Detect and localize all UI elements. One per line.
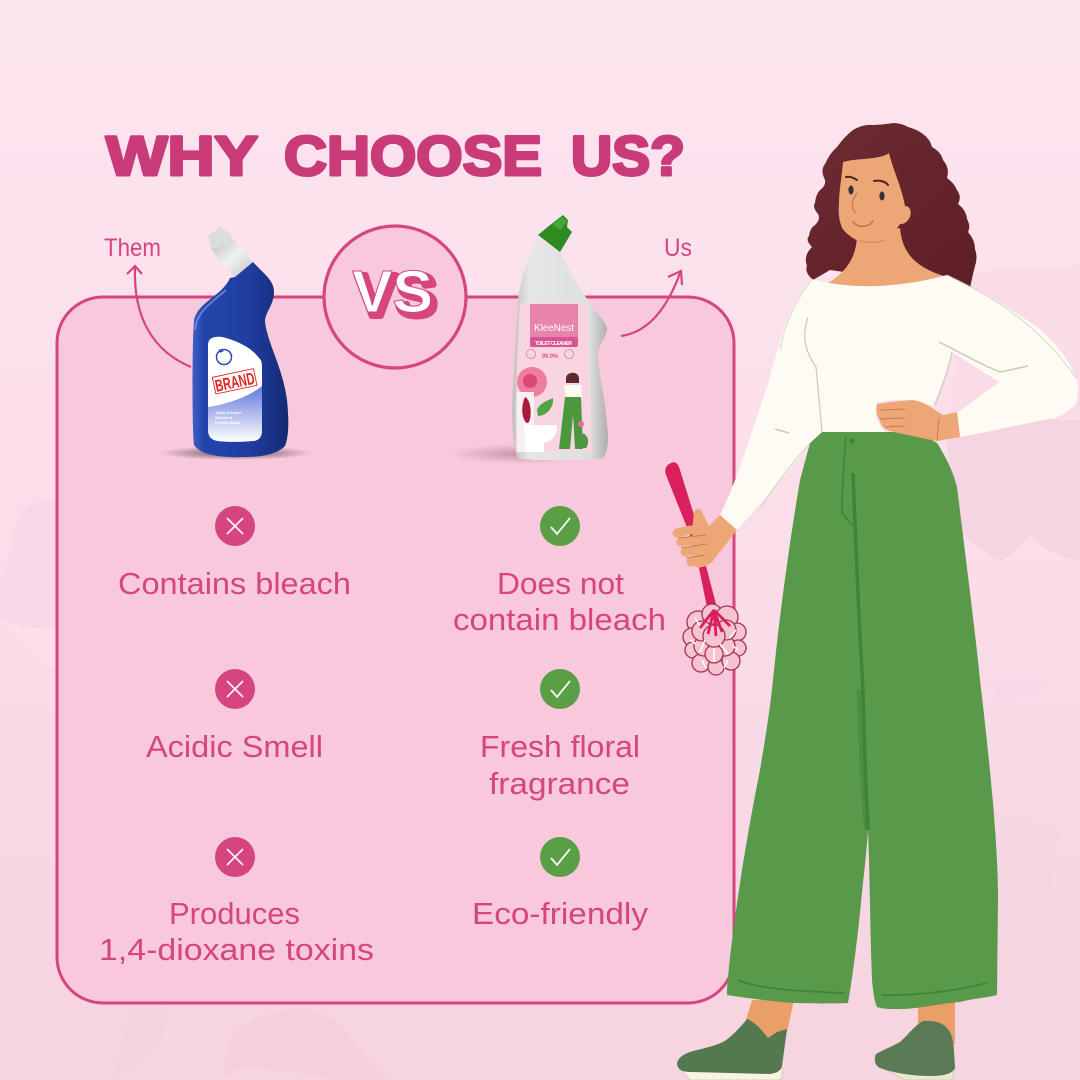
vs badge (324, 226, 466, 368)
trouser shading (738, 436, 987, 995)
item: acidic smell: Acidic Smell (146, 729, 323, 764)
item: toxins: Produces (169, 896, 300, 931)
label: Us: Us (664, 234, 692, 262)
item: no bleach (453, 506, 666, 637)
sweater folds (761, 275, 1076, 507)
title: US? (571, 124, 685, 187)
column: them (99, 506, 374, 967)
hand holding brush (677, 509, 737, 567)
item: eco-friendly (472, 837, 649, 931)
title: WHY (106, 124, 258, 187)
vs badge: VS (352, 259, 433, 325)
item: contains bleach (118, 506, 351, 601)
illustration: woman with toilet brush (665, 123, 1078, 1080)
bottle label: BRAND (213, 369, 256, 396)
panel: comparison card (57, 297, 734, 1003)
title: CHOOSE (284, 124, 542, 187)
tuft streaks (690, 618, 738, 668)
bottle label: TOILET CLEANER (535, 341, 572, 347)
arrow: Them (127, 266, 191, 367)
product: KleeNest bottle (450, 215, 608, 464)
label: Them: Them (104, 234, 161, 262)
item: eco-friendly: Eco-friendly (472, 896, 649, 931)
arrow: Us (621, 271, 682, 336)
item: contains bleach: Contains bleach (118, 566, 351, 601)
legs (746, 1000, 955, 1045)
item: floral fragrance: fragrance (489, 766, 630, 801)
toilet brush head (683, 604, 746, 675)
title (106, 124, 685, 187)
item: acidic smell (146, 669, 323, 764)
item: floral fragrance (480, 669, 640, 801)
face details (846, 177, 888, 242)
item: floral fragrance: Fresh floral (480, 729, 640, 764)
hand on hip (876, 400, 960, 441)
item: no bleach: contain bleach (453, 602, 666, 637)
bottle label: 99.9% (542, 354, 559, 360)
bottle label (208, 337, 262, 442)
column: us (453, 506, 666, 931)
hair (806, 123, 976, 288)
item: no bleach: Does not (497, 566, 624, 601)
brush stem spread (700, 610, 730, 636)
product: competitor bottle (160, 227, 312, 460)
sweater (720, 275, 1078, 530)
vs badge: VS (356, 263, 437, 329)
tufts (683, 604, 746, 675)
bottle label (516, 303, 592, 452)
finger lines (879, 409, 939, 441)
toilet brush handle (665, 462, 730, 618)
shoes (677, 1019, 955, 1080)
bottle label: KleeNest (534, 322, 574, 334)
bottle label: Toilet Cleaner (215, 410, 242, 415)
neck (827, 228, 944, 300)
item: toxins (99, 837, 374, 967)
trousers (727, 432, 998, 1009)
item: toxins: 1,4-dioxane toxins (99, 932, 374, 967)
bottle label: Disinfect (215, 415, 233, 420)
face (839, 153, 911, 243)
bottle label: Crystal White (215, 420, 241, 425)
